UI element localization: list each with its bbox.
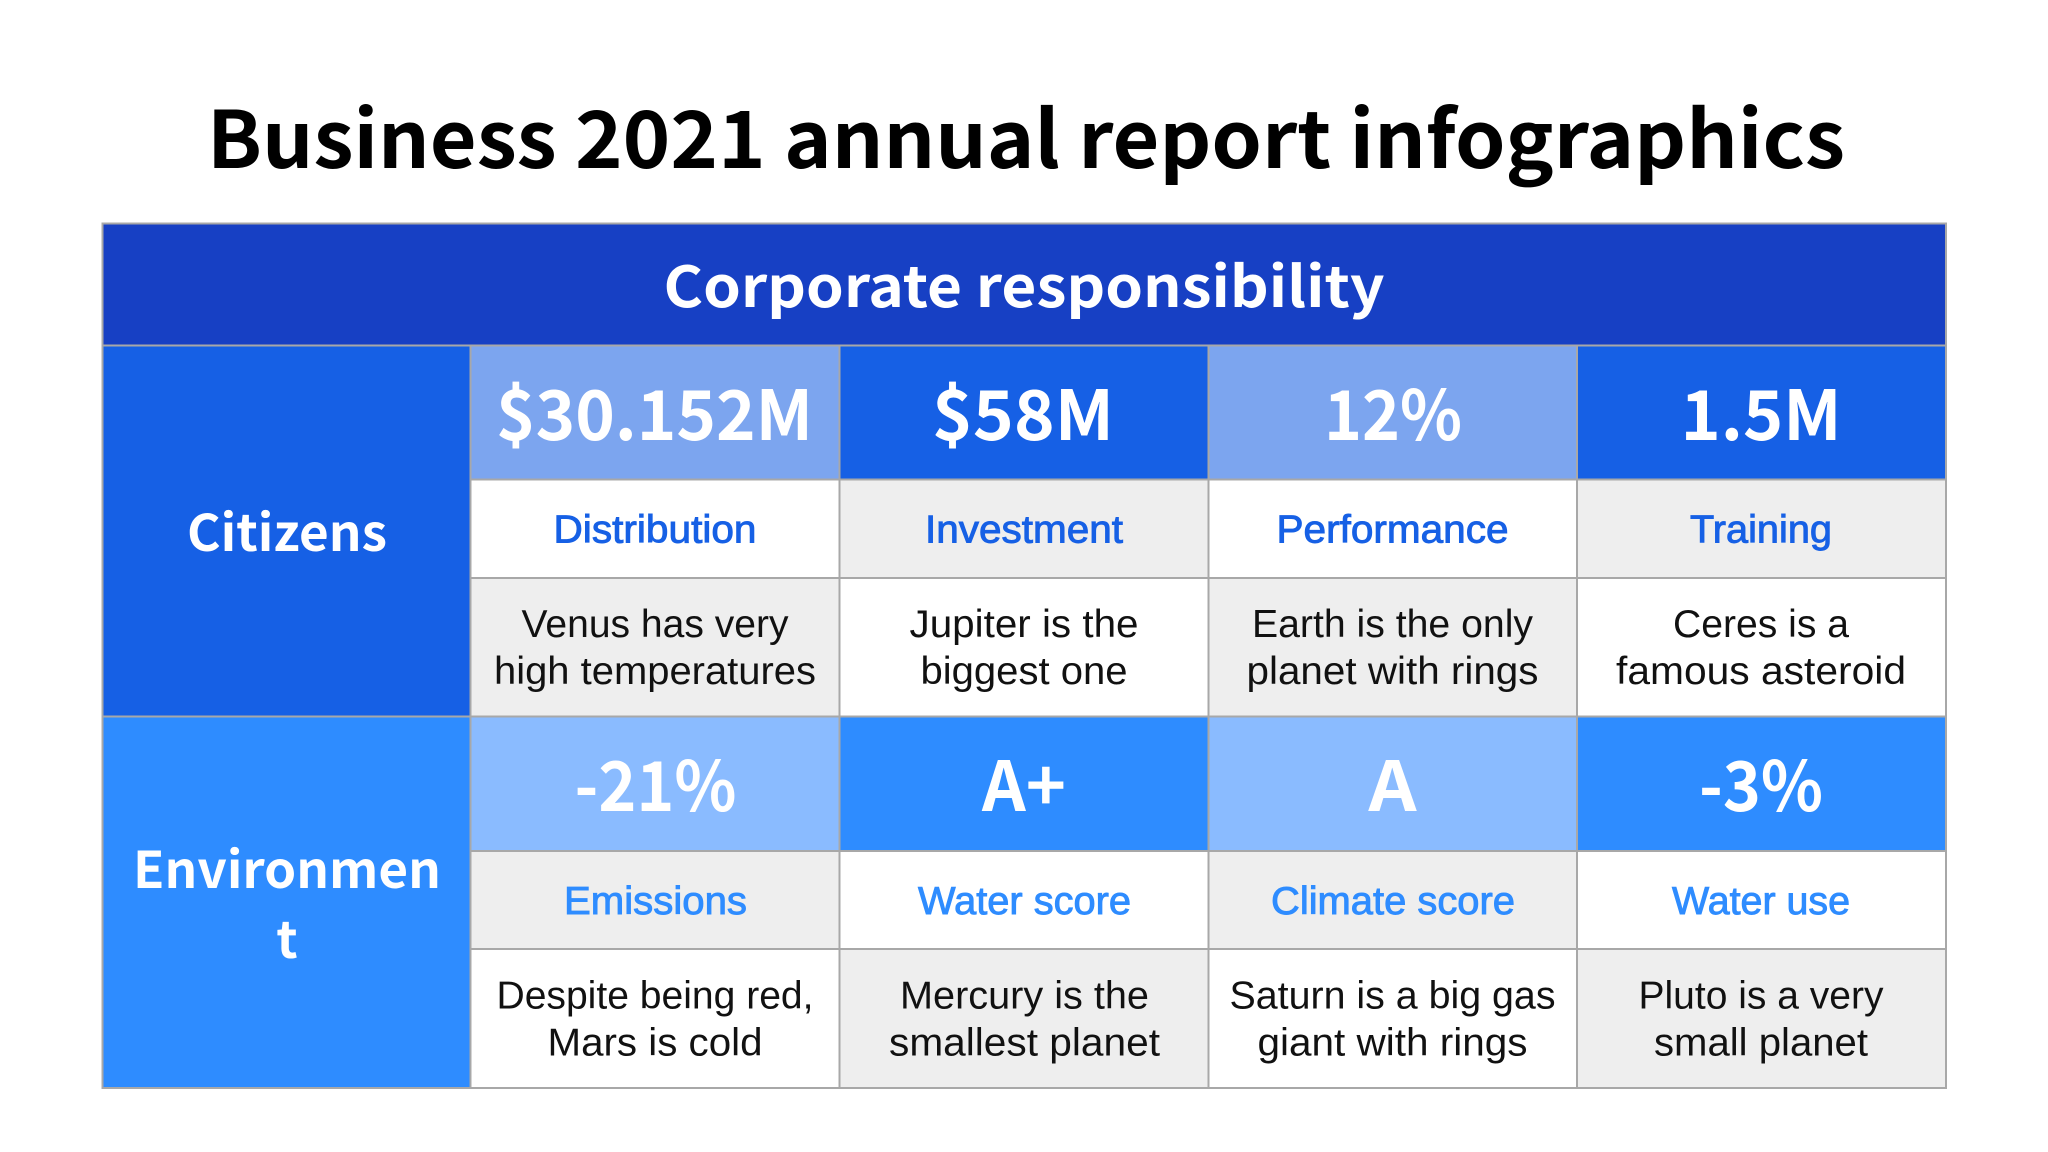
column: training: famous asteroid (1616, 650, 1906, 693)
column: emissions: Despite being red, (496, 974, 814, 1018)
column: training: Ceres is a (1673, 603, 1850, 646)
column: water use: small planet (1654, 1022, 1868, 1065)
row label: environment (102, 716, 470, 1088)
table: corporate responsibility (102, 224, 1946, 1088)
column: training: 1.5M (1680, 360, 1842, 460)
column: climate score (1208, 716, 1577, 1088)
title: Business 2021 annual report infographics (207, 76, 1845, 191)
column: training (1577, 346, 1946, 716)
column: performance: 12% (1324, 360, 1462, 460)
column: water use: Water use (1672, 880, 1850, 923)
column: climate score: giant with rings (1258, 1022, 1528, 1065)
header band: Corporate responsibility (664, 242, 1384, 324)
section: environment (102, 716, 1946, 1088)
column: emissions: Emissions (564, 880, 747, 923)
column: climate score: Saturn is a big gas (1230, 974, 1556, 1018)
column: investment: biggest one (920, 650, 1128, 693)
column: water score: Water score (918, 880, 1131, 923)
column: water score: smallest planet (889, 1022, 1160, 1065)
section: citizens (102, 346, 1946, 716)
column: climate score: A (1367, 731, 1417, 831)
column: water score: Mercury is the (900, 974, 1149, 1018)
column: investment (840, 346, 1208, 716)
column: performance: Performance (1276, 509, 1508, 552)
column: climate score: Climate score (1271, 880, 1515, 923)
column: distribution: high temperatures (494, 650, 816, 693)
column: training: Training (1690, 509, 1832, 552)
row label: citizens (102, 346, 470, 716)
row label: environment: t (276, 899, 298, 973)
column: water score: A+ (981, 731, 1066, 831)
column: water use: -3% (1699, 731, 1823, 831)
column: emissions: Mars is cold (548, 1022, 762, 1065)
column: distribution: Distribution (554, 509, 756, 552)
column: investment: Investment (925, 509, 1123, 552)
row label: environment: Environmen (133, 829, 441, 903)
column: performance (1208, 346, 1577, 716)
row label: citizens: Citizens (187, 492, 387, 566)
column: emissions: -21% (574, 731, 736, 831)
column: water use: Pluto is a very (1638, 974, 1884, 1018)
column: emissions (470, 716, 840, 1088)
column: performance: Earth is the only (1252, 603, 1534, 646)
column: water score (840, 716, 1208, 1088)
column: distribution: Venus has very (522, 603, 789, 646)
column: investment: Jupiter is the (910, 603, 1138, 646)
column: performance: planet with rings (1246, 650, 1538, 693)
column: distribution: $30.152M (496, 360, 813, 460)
header band (102, 224, 1946, 346)
column: water use (1577, 716, 1946, 1088)
column: distribution (470, 346, 840, 716)
column: investment: $58M (932, 360, 1114, 460)
